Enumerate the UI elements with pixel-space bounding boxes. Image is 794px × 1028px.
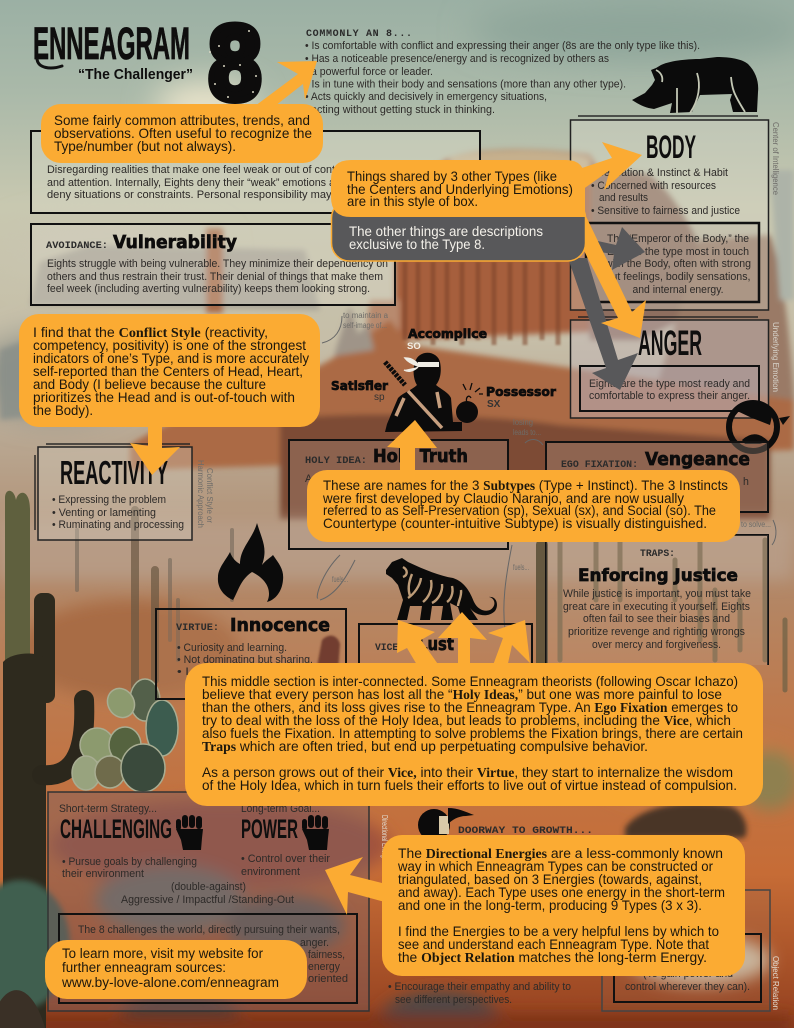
panel: center of intelligence body: Eight is the type most in touch [607, 246, 749, 258]
panel: core description box: deny situations or constraints. Personal responsibility may be [47, 189, 347, 201]
callout: directional energies [325, 835, 745, 976]
callout: conflict style: indicators of one’s Type, and is more accurately [33, 351, 309, 366]
panel: center of intelligence body [570, 116, 780, 310]
arrow: orange to body [570, 142, 642, 190]
panel: virtue [156, 609, 346, 699]
callout: attributes: observations. Often useful to recognize the [54, 126, 312, 141]
big type number 8: 8 [206, 6, 264, 123]
panel: core description box: Disregarding realities that make one feel weak or out of control [47, 164, 347, 176]
panel: center of intelligence body: and results [599, 192, 648, 204]
panel: directional energies: • Pursue goals by challenging [62, 856, 197, 868]
panel: directional energies: energy [308, 961, 341, 973]
panel: center of intelligence body: gut feelings, bodily sensations, [606, 271, 750, 283]
panel: directional energies: The 8 challenges the world, directly pursuing their wants, [78, 924, 340, 936]
panel: directional energies: POWER [241, 814, 298, 844]
panel: directional energies: environment [241, 866, 300, 878]
icon: fist long-term [302, 815, 329, 850]
panel: doorway to growth: Directional Energies [380, 815, 389, 865]
panel: object relation: control wherever they can). [625, 981, 750, 993]
callout: directional energies: way in which Enneagram Types can be constructed or [397, 859, 713, 874]
subtypes: ninja icon and labels: Satisfier [331, 379, 388, 393]
panel: traps [546, 535, 768, 665]
icon: snake [418, 808, 474, 841]
panel: ego fixation: EGO FIXATION: [561, 460, 638, 471]
subtypes: ninja icon and labels: SO [407, 341, 421, 352]
callout: conflict style: competency, positivity) is one of the strongest [33, 338, 306, 353]
arrow: to vice right [488, 620, 530, 668]
panel: center of intelligence body: BODY [646, 129, 696, 165]
callout: conflict style: I find that the Conflict Style (reactivity, [33, 325, 268, 340]
panel: avoidance [31, 224, 395, 305]
callout: attributes: Some fairly common attributes, trends, and [54, 113, 310, 128]
panel: ego fixation: h [743, 476, 749, 488]
panel: directional energies: CHALLENGING [60, 814, 172, 844]
panel: holy idea: Holy Truth [373, 446, 468, 467]
panel: virtue: • Not dominating but sharing. [177, 654, 313, 666]
header: title: “The Challenger” [78, 67, 193, 83]
panel: doorway to growth: • Encourage their empathy and ability to [388, 981, 571, 993]
panel: avoidance: AVOIDANCE: [46, 241, 108, 252]
arrow: orange to anger [566, 208, 646, 338]
panel: center of intelligence body: and internal energy. [632, 284, 724, 296]
callout: middle section [185, 612, 763, 806]
panel: commonly an 8: a powerful force or leader. [311, 66, 433, 78]
callout: website: further enneagram sources: [62, 960, 226, 976]
panel: commonly an 8: • Is in tune with their body and sensations (more than any other type). [305, 78, 626, 90]
callout: website: To learn more, visit my website for [62, 946, 263, 962]
callout: website [45, 940, 307, 999]
panel: underlying emotion anger: ANGER [638, 324, 702, 363]
panel: directional energies: Long-term Goal... [241, 803, 320, 815]
panel: directional energies: • Control over their [241, 853, 330, 865]
callout: subtypes: referred to as Self-Preservation (sp), Sexual (sx), and Social (so). The [323, 503, 716, 518]
panel: holy idea: HOLY IDEA: [305, 456, 367, 467]
panel: directional energies: (double-against) [171, 881, 246, 893]
panel: vice [359, 624, 532, 690]
panel: directional energies: Short-term Strategy... [59, 803, 157, 815]
icon: fist short-term [176, 815, 203, 850]
arrow: to subtypes [387, 420, 437, 475]
panel: reactivity conflict style: Harmonic Approach [196, 460, 205, 528]
callout: subtypes: were first developed by Claudio Naranjo, and are now usually [322, 491, 684, 506]
panel: commonly an 8: • Is comfortable with conflict and expressing their anger (8s are the only type like this). [305, 40, 700, 52]
callout: middle section: try to deal with the loss of the Holy Idea, but leads to problems, including the Vice, which [202, 713, 731, 728]
flow notes: losing [513, 418, 533, 427]
icon: rhino [632, 57, 758, 113]
callout: middle section: of the Holy Idea, which in turn fuels their efforts to live out of virtue instead of compulsion. [202, 778, 737, 793]
panel: virtue: • Curiosity and learning. [177, 642, 287, 654]
panel: commonly an 8: • Acts quickly and decisively in emergency situations, [305, 91, 547, 103]
panel: directional energies [48, 792, 369, 1011]
callout: attributes: Type/number (but not always). [54, 139, 236, 154]
subtypes: ninja icon and labels: SX [487, 399, 501, 410]
callout: directional energies: and one in the long-term, producing 9 Types (3 x 3). [398, 898, 702, 913]
callout: middle section: believe that every person has lost all the “Holy Ideas,” but one was more painful to lose [202, 687, 722, 702]
header: title: ENNEAGRAM [33, 18, 190, 69]
callout: subtypes [307, 420, 740, 542]
panel: reactivity conflict style: • Ruminating and processing [52, 519, 184, 531]
panel: directional energies: anger. [300, 937, 329, 949]
arrow: to vice left [397, 620, 442, 670]
panel: commonly an 8 [305, 29, 700, 116]
panel: core description box: and attention. Internally, Eights deny their “weak” emotions and [47, 177, 347, 189]
panel: doorway to growth [380, 808, 593, 1006]
panel: virtue: VIRTUE: [176, 623, 219, 634]
callout: conflict style: self-reported than the Centers of Head, Heart, [33, 364, 303, 379]
panel: commonly an 8: COMMONLY AN 8... [306, 29, 412, 40]
panel: center of intelligence body: • Sensitive to fairness and justice [591, 205, 740, 217]
callout: attributes [41, 61, 323, 163]
flow notes: to solve... [741, 520, 771, 529]
panel: center of intelligence body: The “Emperor of the Body,” the [607, 233, 749, 245]
panel: traps: often fail to see their biases and [583, 613, 730, 625]
panel: virtue: • Leading others. [177, 666, 277, 678]
flow notes: leads to... [513, 428, 541, 437]
panel: holy idea [289, 440, 508, 549]
panel: center of intelligence body: • Concerned with resources [591, 180, 716, 192]
icon: angry face [729, 402, 790, 451]
arrow: grey to body description [584, 227, 645, 270]
panel: reactivity conflict style: • Expressing the problem [52, 494, 166, 506]
callout: middle section: than the others, and its loss gives rise to the Enneagram Type. An Ego Fixation emerges to [202, 700, 738, 715]
callout: middle section: also fuels the Fixation. In attempting to solve problems the Fixation brings, there are certain [202, 726, 743, 741]
panel: reactivity conflict style: REACTIVITY [60, 454, 168, 491]
icon: flame [218, 523, 283, 602]
callout: middle section: As a person grows out of their Vice, into their Virtue, they start to internalize the wisdom [202, 765, 733, 780]
subtypes: ninja icon and labels: Possessor [486, 385, 556, 399]
panel: directional energies: their environment [62, 868, 144, 880]
flow notes: fuels... [513, 563, 529, 572]
panel: avoidance: feel week (including averting vulnerability) keeps them looking strong. [47, 283, 370, 295]
callout: conflict style: prioritizes the Head and is out-of-touch with [33, 390, 295, 405]
arrow: to directional energies [325, 857, 390, 915]
panel: traps: TRAPS: [640, 549, 675, 560]
panel: center of intelligence body: Sensation & Instinct & Habit [597, 167, 728, 179]
callout: shared things: Things shared by 3 other Types (like [347, 169, 557, 184]
panel: directional energies: fairness, [308, 949, 345, 961]
panel: reactivity conflict style: Conflict Style or [205, 468, 214, 523]
panel: underlying emotion anger: Eights are the type most ready and [589, 378, 750, 390]
panel: ego fixation [546, 442, 768, 512]
panel: vice: VICE: [375, 643, 404, 654]
callout: middle section: Traps which are often tried, but end up perpetuating compulsive behavior. [202, 739, 648, 754]
panel: doorway to growth: see different perspectives. [395, 994, 512, 1006]
callout: shared things: are in this style of box. [347, 194, 478, 209]
panel: traps: great care in executing it yourself. Eights [563, 601, 750, 613]
header: title [33, 18, 193, 83]
panel: avoidance: Vulnerability [113, 232, 237, 253]
panel: center of intelligence body: with the Body, often with strong [604, 258, 751, 270]
panel: commonly an 8: • Has a noticeable presence/energy and is recognized by others as [305, 53, 609, 65]
callout: directional energies: The Directional Energies are a less-commonly known [398, 846, 723, 861]
subtypes: ninja icon and labels [331, 327, 556, 432]
panel: object relation: (To gain power and [643, 968, 733, 980]
panel: directional energies: oriented [308, 973, 348, 985]
panel: directional energies: Aggressive / Impactful /Standing-Out [121, 894, 294, 906]
panel: reactivity conflict style: • Venting or lamenting [52, 507, 156, 519]
panel: underlying emotion anger: Underlying Emotion [771, 322, 780, 392]
callout: conflict style [19, 314, 320, 475]
icon: tiger [386, 558, 497, 620]
arrow: to commonly an 8 list [255, 61, 317, 106]
callout: website: www.by-love-alone.com/enneagram [61, 975, 279, 991]
flow notes: self-image of... [343, 321, 387, 330]
callout: subtypes: Countertype (counter-intuitive Subtype) is visually distinguished. [323, 516, 707, 531]
panel: traps: Enforcing Justice [578, 566, 738, 586]
subtypes: ninja icon and labels: sp [374, 392, 385, 403]
panel: vice: Lust [418, 634, 454, 655]
callout: shared things: exclusive to the Type 8. [349, 237, 485, 252]
panel: holy idea: A [305, 473, 313, 485]
callout: shared things: the Centers and Underlying Emotions) [347, 182, 573, 197]
panel: commonly an 8: acting without getting stuck in thinking. [311, 104, 495, 116]
callout: shared things [331, 142, 646, 390]
panel: traps: prioritize revenge and righting wrongs [568, 626, 745, 638]
panel: object relation: Object Relation [771, 956, 780, 1010]
panel: avoidance: others and thus restrain their trust. Their denial of things that make them [47, 271, 383, 283]
panel: traps: While justice is important, you must take [563, 588, 751, 600]
callout: directional energies: and away). Each Type uses one energy in the short-term [398, 885, 725, 900]
panel: avoidance: Eights struggle with being vulnerable. They minimize their dependency on [47, 258, 388, 270]
callout: directional energies: I find the Energies to be a very helpful lens by which to [398, 924, 719, 939]
panel: object relation [602, 890, 780, 1011]
callout: middle section: This middle section is inter-connected. Some Enneagram theorists (following Oscar Ichazo) [202, 674, 738, 689]
callout: directional energies: the Object Relation matches the long-term Energy. [398, 950, 707, 965]
panel: center of intelligence body: Center of Intelligence [771, 122, 780, 196]
arrow: to reactivity [130, 425, 180, 475]
arrow: to vice centre [438, 612, 487, 670]
panel: core description box [31, 131, 480, 213]
panel: reactivity conflict style [35, 444, 214, 540]
arrow: grey to anger description [568, 258, 638, 390]
panel: virtue: Innocence [230, 615, 330, 636]
panel: ego fixation: Vengeance [645, 449, 750, 470]
flow notes: fuels... [332, 575, 348, 584]
panel: underlying emotion anger [570, 317, 780, 418]
callout: subtypes: These are names for the 3 Subtypes (Type + Instinct). The 3 Instincts [323, 478, 728, 493]
flow notes [317, 311, 776, 630]
panel: traps: over mercy and forgiveness. [592, 639, 721, 651]
callout: directional energies: triangulated, based on 3 Energies (towards, against, [398, 872, 702, 887]
subtypes: ninja icon and labels: Accomplice [408, 327, 487, 341]
panel: underlying emotion anger: comfortable to express their anger. [589, 390, 750, 402]
callout: shared things: The other things are descriptions [349, 224, 543, 239]
panel: doorway to growth: DOORWAY TO GROWTH... [458, 826, 593, 837]
callout: directional energies: see and understand each Enneagram Type. Note that [398, 937, 709, 952]
callout: conflict style: and Body (I believe because the culture [33, 377, 266, 392]
flow notes: to maintain a [343, 311, 389, 320]
callout: conflict style: the Body). [33, 403, 93, 418]
